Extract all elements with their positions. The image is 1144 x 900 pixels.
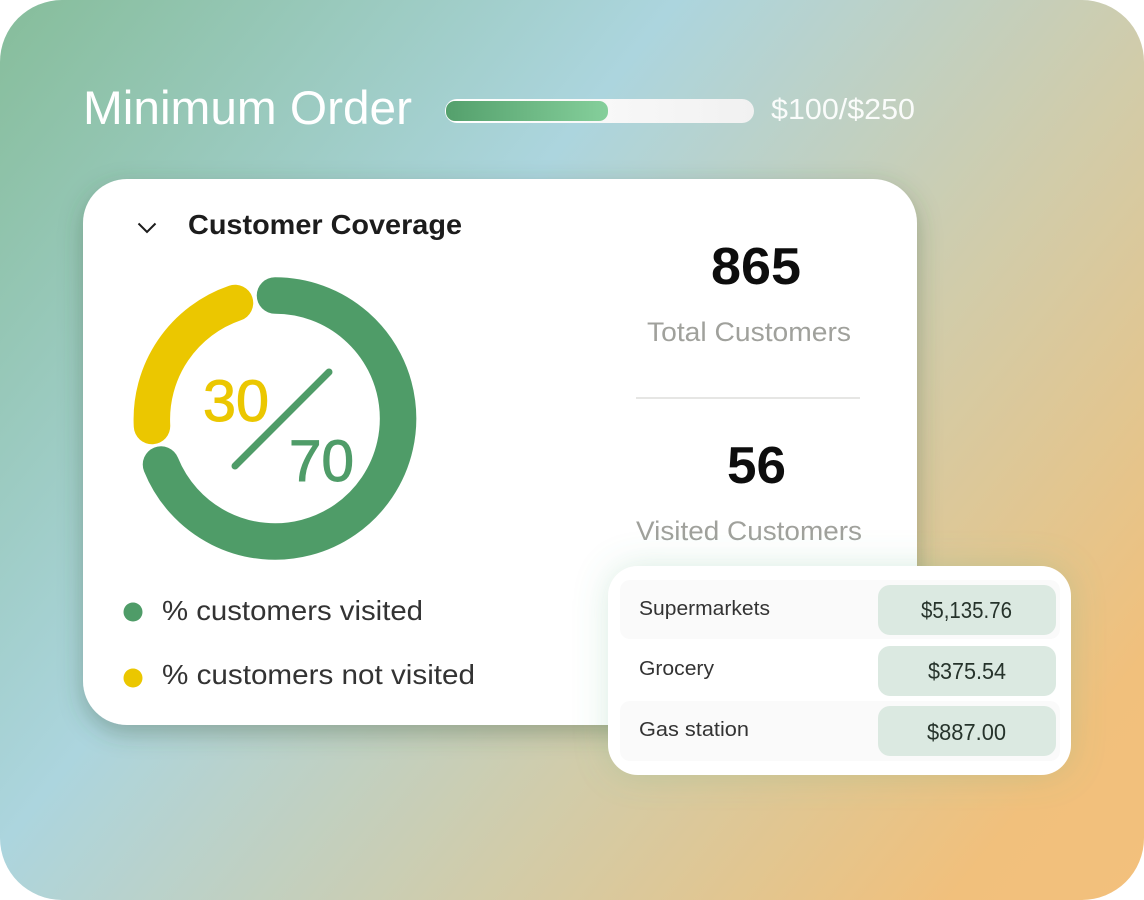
stat: total customers [647, 238, 851, 347]
row: Grocery [639, 646, 1056, 696]
progress bar [445, 99, 754, 123]
row: Gas station: $887.00 [927, 719, 1006, 745]
legend [124, 595, 475, 690]
card background [83, 179, 917, 725]
stat: visited customers [636, 437, 862, 546]
donut chart: 30 [203, 369, 269, 434]
panel: spending table [608, 566, 1071, 775]
stat: total customers: 865 [711, 238, 801, 296]
row: Supermarkets: $5,135.76 [921, 597, 1012, 623]
progress value: $100/$250 [771, 94, 915, 126]
stat: total customers: Total Customers [647, 317, 851, 347]
card heading: Customer Coverage [188, 209, 462, 240]
stat: visited customers: 56 [727, 437, 786, 495]
row: Supermarkets: Supermarkets [639, 598, 770, 620]
panel: customer coverage [83, 179, 917, 725]
heading: Minimum Order: Minimum Order [83, 81, 412, 134]
row: Grocery: $375.54 [928, 658, 1006, 684]
row: Gas station [620, 701, 1060, 761]
legend: % customers visited [162, 595, 423, 626]
row: Supermarkets [620, 580, 1060, 639]
row: Gas station: Gas station [639, 719, 749, 741]
row: Grocery: Grocery [639, 658, 714, 680]
stat: visited customers: Visited Customers [636, 516, 862, 546]
icon: chevron [138, 224, 156, 232]
donut chart [152, 296, 398, 541]
table card [608, 566, 1071, 775]
legend: % customers not visited [162, 659, 475, 690]
donut chart: 70 [289, 429, 354, 494]
